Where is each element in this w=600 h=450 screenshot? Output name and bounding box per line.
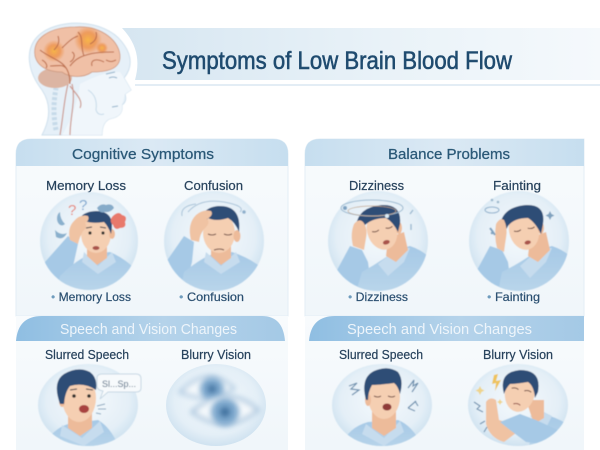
bullet label: memory loss: • Memory Loss	[51, 290, 131, 304]
bullet label: fainting: • Fainting	[487, 290, 540, 304]
label: dizziness: Dizziness	[349, 178, 404, 193]
icon: blurry eyes	[166, 364, 266, 446]
label: blurry vision: Blurry Vision	[181, 347, 251, 362]
panel: balance problems	[305, 139, 584, 316]
icon: slurred speech person, eyes closed	[332, 364, 432, 450]
speech bubble text: Sl...Sp...	[102, 379, 136, 389]
icon: confusion person	[164, 191, 264, 292]
label: fainting: Fainting	[493, 178, 541, 193]
title banner	[122, 28, 600, 85]
heading: balance problems: Balance Problems	[388, 146, 510, 163]
heading: speech and vision changes	[309, 316, 584, 341]
icon: dizziness person	[328, 191, 430, 292]
panel: speech and vision changes (left)	[16, 316, 288, 450]
heading: speech and vision changes: Speech and Vision Changes	[60, 321, 237, 338]
heading: cognitive symptoms: Cognitive Symptoms	[72, 146, 214, 163]
panel: speech and vision changes (right)	[305, 316, 584, 450]
heading: speech and vision changes	[16, 316, 285, 341]
icon: tingling hand person	[468, 364, 570, 450]
heading: speech and vision changes: Speech and Vision Changes	[347, 321, 532, 338]
label: memory loss: Memory Loss	[46, 178, 127, 193]
icon: slurred speech person	[38, 364, 141, 450]
heading: cognitive symptoms	[16, 139, 288, 166]
icon: memory loss person	[40, 192, 138, 292]
illustration: head with brain	[29, 23, 131, 135]
title: Symptoms of Low Brain Blood Flow	[162, 47, 513, 75]
label: slurred speech: Slurred Speech	[339, 347, 423, 362]
bullet label: dizziness: • Dizziness	[348, 290, 408, 304]
heading: balance problems	[305, 139, 584, 166]
icon: memory loss person: ?	[68, 202, 76, 219]
label: confusion: Confusion	[184, 178, 243, 193]
bullet label: confusion: • Confusion	[179, 290, 244, 304]
label: blurry vision: Blurry Vision	[483, 347, 553, 362]
icon: memory loss person: ?	[79, 197, 87, 214]
icon: fainting person	[469, 191, 572, 292]
panel: cognitive symptoms	[16, 139, 288, 316]
label: slurred speech: Slurred Speech	[45, 347, 129, 362]
